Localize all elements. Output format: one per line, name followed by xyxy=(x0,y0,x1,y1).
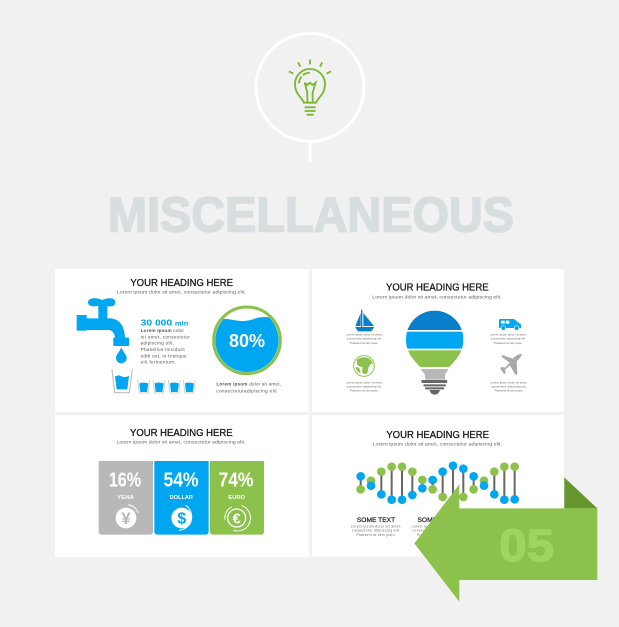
card: yena: YENA xyxy=(117,495,134,501)
subheading: bulb panel: Lorem ipsum dolor sit amet, consectetur adipiscing elit. xyxy=(372,294,502,299)
icon: faucet xyxy=(77,298,129,346)
text block: gauge description: Lorem Ipsum dolor sit amet, xyxy=(216,382,281,387)
text: dna caption one: Praesent at sem justo. xyxy=(356,533,396,537)
stat: 30 000 mln: 30 000 mln xyxy=(141,317,188,327)
card: euro: EURO xyxy=(228,495,245,501)
text block: gauge description: consecteturadipiscing elit xyxy=(216,388,277,393)
heading: currency panel: YOUR HEADING HERE xyxy=(130,428,233,439)
icon: sailboat xyxy=(355,310,374,331)
text: dna caption two: Praesent at sem justo. xyxy=(417,533,456,537)
chart: 80% water gauge: 80% xyxy=(229,330,265,351)
icon: airplane xyxy=(500,354,522,375)
heading: water panel: YOUR HEADING HERE xyxy=(130,278,234,289)
text: sailboat caption: Lorem ipsum dolor sit amet, xyxy=(346,333,383,337)
chart: segmented bulb xyxy=(406,310,464,395)
text block: faucet description: adipiscing elit. xyxy=(141,341,174,346)
card: euro: € xyxy=(233,511,241,527)
text block: faucet description: elit fermentum. xyxy=(141,360,176,365)
text: airplane caption: Praesent at sem justo. xyxy=(495,389,524,393)
subheading: currency panel: Lorem ipsum dolor sit amet, consectetur adipiscing elit. xyxy=(116,439,245,444)
card: dollar: DOLLAR xyxy=(170,495,193,501)
icon: globe xyxy=(354,356,374,376)
chart: dna helix xyxy=(356,461,519,504)
text: sailboat caption: consectetur adipiscing elit. xyxy=(347,337,382,341)
panel: bulb xyxy=(312,269,564,412)
text block: gauge description xyxy=(216,382,281,393)
text: van caption: consectetur adipiscing elit. xyxy=(491,337,526,341)
text: van caption: Lorem ipsum dolor sit amet, xyxy=(490,333,527,337)
card: euro xyxy=(210,461,264,535)
text: dna caption one xyxy=(351,517,401,537)
card: euro: 74% xyxy=(218,469,254,491)
text block: faucet description: Phasellus tincidunt xyxy=(141,347,185,352)
text: van caption xyxy=(490,333,527,345)
card: dollar: $ xyxy=(177,511,186,528)
chart: 80% water gauge xyxy=(212,307,285,375)
subheading: water panel: Lorem ipsum dolor sit amet, consectetur adipiscing elit. xyxy=(117,289,246,294)
card: yena: ¥ xyxy=(121,509,131,528)
text: globe caption: Praesent at sem justo. xyxy=(350,389,379,393)
text: sailboat caption: Praesent at sem justo. xyxy=(350,341,379,345)
heading: dna panel: YOUR HEADING HERE xyxy=(386,430,490,441)
subheading: dna panel: Lorem ipsum dolor sit amet, consectetur adipiscing elit. xyxy=(373,441,502,446)
text: airplane caption: consectetur adipiscing elit. xyxy=(491,384,527,388)
text: dna caption two: SOME TEXT xyxy=(417,517,456,524)
text: dna caption two xyxy=(412,517,462,537)
panel: dna xyxy=(312,415,597,602)
panel: currency xyxy=(55,415,309,557)
card: yena xyxy=(99,461,153,535)
text block: faucet description: Lorem Ipsum color xyxy=(141,328,184,333)
title: MISCELLANEOUS xyxy=(108,188,514,242)
text block: faucet description: sit amet, consectetur xyxy=(141,334,190,339)
text: dna caption two: consectetur adipiscing elit. xyxy=(412,529,461,533)
text block: faucet description: nibh est, in tristique xyxy=(141,353,187,358)
text block: faucet description xyxy=(141,328,190,365)
text: globe caption: Lorem ipsum dolor sit amet, xyxy=(346,380,383,384)
text: dna caption one: SOME TEXT xyxy=(357,517,395,524)
card: yena: 16% xyxy=(109,469,141,491)
arrow fold xyxy=(564,477,597,508)
text: airplane caption: Lorem ipsum dolor sit amet, xyxy=(491,380,528,384)
text: dna caption one: Lorem ipsum dolor sit amet, xyxy=(351,524,401,528)
text: airplane caption xyxy=(491,380,528,393)
text: dna caption two: Lorem ipsum dolor sit amet, xyxy=(412,524,462,528)
icons: glasses xyxy=(112,369,195,393)
text: sailboat caption xyxy=(346,333,383,345)
text: van caption: Praesent at sem justo. xyxy=(494,341,523,345)
panel: water xyxy=(55,269,309,412)
text: globe caption xyxy=(346,380,383,393)
icon: water drop xyxy=(116,347,127,363)
icon: van xyxy=(499,319,521,330)
arrow: section marker xyxy=(414,484,597,602)
heading: bulb panel: YOUR HEADING HERE xyxy=(386,282,489,293)
text: dna caption one: consectetur adipiscing elit. xyxy=(352,529,400,533)
text: globe caption: consectetur adipiscing elit. xyxy=(347,384,382,388)
card: dollar: 54% xyxy=(163,469,199,491)
icon: light bulb badge xyxy=(256,33,364,162)
card: dollar xyxy=(154,461,209,535)
section number: 05 xyxy=(499,520,554,571)
